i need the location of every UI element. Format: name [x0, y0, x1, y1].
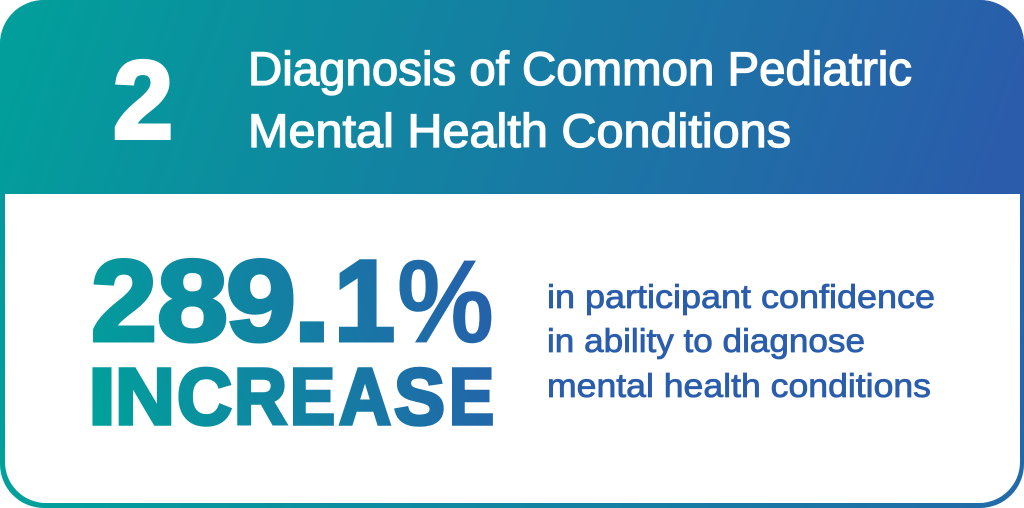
big statistic [91, 236, 494, 368]
increase label: E [449, 352, 494, 441]
increase label: R [234, 352, 287, 441]
heading: Mental Health Conditions [248, 104, 791, 157]
big statistic: 2 [91, 238, 157, 366]
increase label: E [290, 352, 335, 441]
increase label: I [88, 352, 116, 441]
description text: in ability to diagnose [547, 322, 865, 359]
heading: Diagnosis of Common Pediatric [248, 42, 912, 95]
heading [248, 42, 912, 157]
big statistic: % [397, 236, 494, 368]
increase label: N [115, 352, 175, 441]
big statistic: . [293, 238, 331, 366]
increase label: C [177, 352, 232, 441]
section number: 2 [113, 39, 173, 162]
big statistic: 1 [334, 238, 395, 366]
increase label [88, 352, 494, 441]
increase label: A [339, 352, 391, 441]
description text: in participant confidence [547, 278, 935, 315]
description text [547, 278, 935, 404]
increase label: S [394, 352, 445, 441]
big statistic: 8 [157, 238, 228, 366]
panel: header band [0, 0, 1024, 194]
description text: mental health conditions [547, 367, 931, 404]
big statistic: 9 [226, 238, 296, 366]
